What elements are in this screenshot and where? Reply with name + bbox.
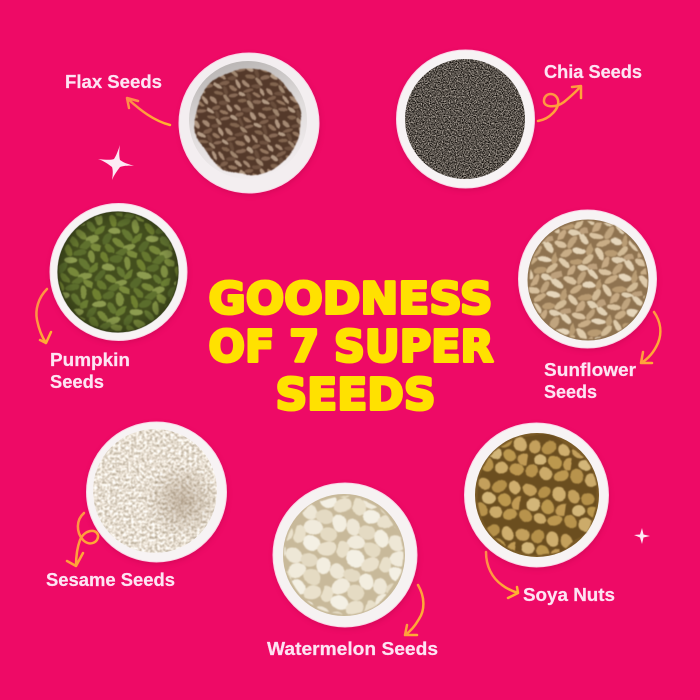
label: sesame seeds: Sesame Seeds xyxy=(46,570,175,590)
title xyxy=(208,274,494,420)
bowl: pumpkin seeds xyxy=(50,204,188,342)
icon: small sparkle xyxy=(634,528,650,544)
label: pumpkin seeds: Seeds xyxy=(50,372,104,392)
arrow: chia seeds xyxy=(538,86,581,121)
label: sunflower seeds: Sunflower xyxy=(544,360,636,380)
bowl: soya nuts xyxy=(464,423,609,569)
label: watermelon seeds: Watermelon Seeds xyxy=(267,639,438,659)
bowl: sesame seeds xyxy=(86,422,227,564)
label: sunflower seeds xyxy=(544,360,636,402)
arrow: flax seeds xyxy=(127,98,170,125)
arrow: soya nuts xyxy=(486,552,518,598)
bowl: flax seeds xyxy=(179,53,320,195)
title: GOODNESS xyxy=(208,274,492,324)
arrow: sesame seeds xyxy=(67,513,98,566)
label: flax seeds: Flax Seeds xyxy=(65,72,162,92)
label: pumpkin seeds: Pumpkin xyxy=(50,350,130,370)
arrow: watermelon seeds xyxy=(405,585,423,635)
bowl: chia seeds xyxy=(396,50,535,190)
title: SEEDS xyxy=(276,370,436,420)
label: soya nuts: Soya Nuts xyxy=(523,585,615,605)
icon: large sparkle xyxy=(98,145,134,180)
arrow: pumpkin seeds xyxy=(36,289,51,343)
label: pumpkin seeds xyxy=(50,350,130,392)
bowl: watermelon seeds xyxy=(273,483,418,629)
label: chia seeds: Chia Seeds xyxy=(544,62,642,82)
bowl: sunflower seeds xyxy=(518,210,657,350)
title: OF 7 SUPER xyxy=(208,322,494,372)
arrow: sunflower seeds xyxy=(641,312,660,363)
label: sunflower seeds: Seeds xyxy=(544,382,597,402)
